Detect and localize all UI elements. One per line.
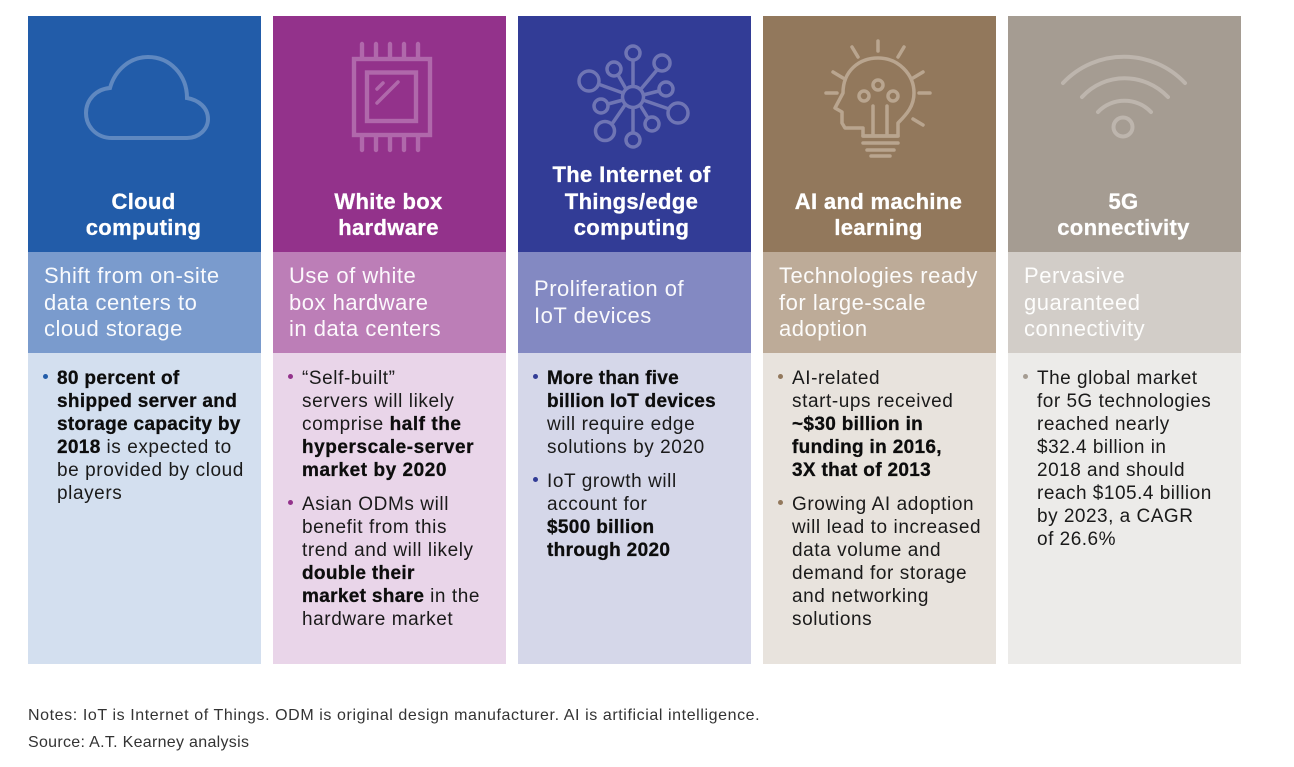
header: AI and machine learning: [763, 16, 996, 252]
subheading: box hardware: [289, 290, 429, 314]
bullet list: AI-related: [792, 368, 880, 389]
bullet list: benefit from this: [302, 517, 447, 538]
bullet list: [28, 353, 261, 664]
title: [795, 188, 962, 240]
bullet list: 80 percent of: [57, 368, 180, 389]
bullet list: [1008, 353, 1241, 664]
title: AI and machine: [795, 188, 962, 214]
bullet list: through 2020: [547, 540, 670, 561]
bullet list: of 26.6%: [1037, 529, 1116, 550]
bullet list: “Self-built”: [302, 368, 396, 389]
subheading: Use of white: [289, 263, 416, 288]
subheading: data centers to: [44, 290, 197, 314]
bullet list: The global market: [1037, 368, 1198, 389]
panel: white box hardware: [273, 16, 506, 664]
bullet list: market by 2020: [302, 460, 447, 481]
title: hardware: [338, 215, 439, 240]
bullet list: reached nearly: [1037, 414, 1170, 435]
icon: cloud: [84, 55, 210, 140]
bullet list: Growing AI adoption: [792, 494, 974, 515]
notes and source: Source: A.T. Kearney analysis: [28, 734, 249, 751]
subheading: adoption: [779, 316, 868, 341]
notes and source: Notes: IoT is Internet of Things. ODM is original design manufacturer. AI is artificial intelligence.: [28, 707, 760, 724]
header: 5G connectivity: [1008, 16, 1241, 252]
panel: AI and machine learning: [763, 16, 996, 664]
bullet list: Asian ODMs will: [302, 494, 449, 515]
bullet list: servers will likely: [302, 391, 454, 412]
bullet list: for 5G technologies: [1037, 391, 1211, 412]
bullet list: $32.4 billion in: [1037, 437, 1166, 458]
bullet list: by 2023, a CAGR: [1037, 506, 1193, 527]
bullet list: shipped server and: [57, 391, 237, 412]
bullet list: players: [57, 483, 122, 504]
bullet list: More than five: [547, 368, 679, 389]
bullet list: start-ups received: [792, 391, 953, 412]
bullet list: 3X that of 2013: [792, 460, 931, 481]
icon: chip: [352, 42, 432, 152]
bullet list: hardware market: [302, 609, 453, 630]
title: White box: [334, 188, 443, 214]
panel: internet of things: [518, 16, 751, 664]
bullet list: storage capacity by: [57, 414, 241, 435]
subheading: [518, 252, 751, 353]
subheading: Pervasive: [1024, 263, 1125, 288]
bullet list: [518, 353, 751, 664]
title: [86, 188, 201, 240]
title: Cloud: [111, 188, 176, 214]
notes and source: [28, 707, 760, 751]
subheading: [763, 252, 996, 353]
bullet list: hyperscale-server: [302, 437, 474, 458]
subheading: cloud storage: [44, 316, 183, 341]
bullet list: [763, 353, 996, 664]
header: internet of things: [518, 16, 751, 252]
title: learning: [834, 215, 923, 240]
subheading: in data centers: [289, 316, 441, 341]
subheading: for large-scale: [779, 290, 926, 314]
title: [552, 162, 711, 240]
bullet list: account for: [547, 494, 647, 515]
bullet list: $500 billion: [547, 517, 654, 538]
title: The Internet of: [552, 162, 711, 187]
bullet list: reach $105.4 billion: [1037, 483, 1212, 504]
bullet list: IoT growth will: [547, 471, 677, 492]
title: Things/edge: [565, 188, 698, 214]
title: [334, 188, 443, 240]
title: computing: [574, 215, 689, 240]
bullet list: ~$30 billion in: [792, 414, 923, 435]
title: 5G: [1108, 188, 1139, 214]
title: computing: [86, 215, 201, 240]
icon: lightbulb head: [824, 39, 932, 158]
subheading: Shift from on-site: [44, 263, 220, 288]
title: connectivity: [1057, 215, 1190, 240]
header: cloud computing: [28, 16, 261, 252]
subheading: Proliferation of: [534, 276, 684, 301]
icon: network: [577, 44, 690, 149]
header: white box hardware: [273, 16, 506, 252]
bullet list: be provided by cloud: [57, 460, 244, 481]
bullet list: trend and will likely: [302, 540, 474, 561]
bullet list: funding in 2016,: [792, 437, 942, 458]
subheading: IoT devices: [534, 302, 652, 328]
panel: 5G connectivity: [1008, 16, 1241, 664]
subheading: guaranteed: [1024, 290, 1141, 314]
bullet list: data volume and: [792, 540, 941, 561]
panel: cloud computing: [28, 16, 261, 664]
bullet list: market share in the: [302, 586, 480, 607]
subheading: [273, 252, 506, 353]
bullet list: 2018 and should: [1037, 460, 1185, 481]
bullet list: [273, 353, 506, 664]
subheading: [28, 252, 261, 353]
bullet list: solutions by 2020: [547, 437, 705, 458]
bullet list: 2018 is expected to: [57, 437, 232, 458]
bullet list: solutions: [792, 609, 872, 630]
bullet list: double their: [302, 563, 415, 584]
bullet list: and networking: [792, 586, 929, 607]
bullet list: comprise half the: [302, 414, 462, 435]
bullet list: billion IoT devices: [547, 391, 716, 412]
bullet list: will lead to increased: [792, 517, 981, 538]
subheading: [1008, 252, 1241, 353]
bullet list: demand for storage: [792, 563, 967, 584]
subheading: Technologies ready: [779, 263, 978, 288]
icon: wifi: [1061, 54, 1187, 138]
title: [1057, 188, 1190, 240]
bullet list: will require edge: [547, 414, 695, 435]
subheading: connectivity: [1024, 316, 1145, 341]
